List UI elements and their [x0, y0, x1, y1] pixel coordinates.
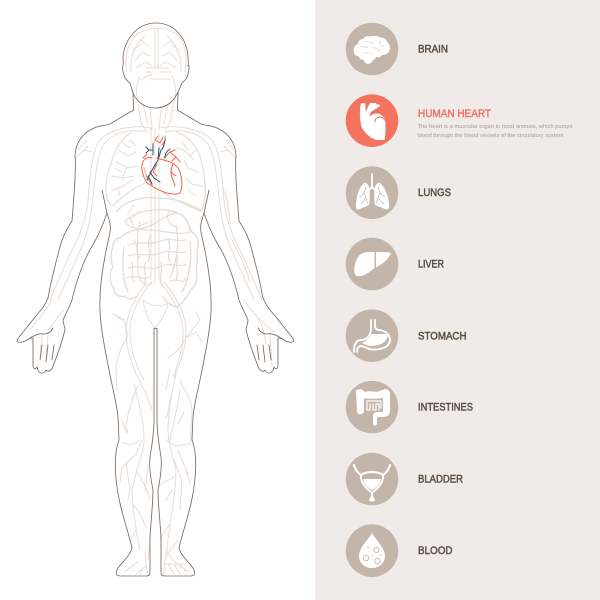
- large intestine: [110, 213, 198, 307]
- outline: right half: [157, 92, 294, 576]
- item: blood: [346, 524, 453, 577]
- description: blood through the blood vessels of the circulatory system: [418, 133, 564, 139]
- icon: heart: [360, 103, 386, 140]
- item: intestines: [346, 381, 473, 433]
- item: lungs: [346, 166, 451, 219]
- heart illustration: [142, 136, 182, 194]
- icon: intestines: [356, 389, 390, 426]
- item: liver: [346, 238, 444, 290]
- left leg vessels: [113, 314, 128, 390]
- icon: brain: [354, 36, 390, 64]
- pelvis and bladder: [126, 282, 151, 380]
- heart outline and arteries: [142, 136, 182, 194]
- icon: lungs: [356, 174, 389, 210]
- label: brain: BRAIN: [418, 43, 448, 55]
- icon: liver: [354, 252, 391, 276]
- left foot vessels: [124, 550, 148, 574]
- neck vessels: [137, 97, 175, 130]
- icon: blood drop: [359, 533, 385, 568]
- brain vessels: [126, 28, 186, 98]
- panel: organ list background: [315, 0, 600, 600]
- item: stomach: [346, 309, 467, 362]
- hand vessels: [30, 300, 274, 366]
- right foot vessels: [164, 550, 190, 574]
- icon: bladder: [354, 465, 390, 502]
- right lung: [160, 132, 205, 211]
- outline: left half: [17, 92, 154, 576]
- shoulders and arm vessels left: [50, 127, 152, 300]
- outline: head and face: [123, 23, 189, 108]
- body outline: [17, 23, 294, 576]
- item: human heart: [346, 94, 574, 147]
- right leg vessels: [166, 312, 202, 445]
- item: brain: [346, 23, 448, 75]
- description: The heart is a muscular organ in most animals, which pumps: [418, 124, 573, 130]
- label: bladder: BLADDER: [418, 474, 463, 486]
- diaphragm: [116, 198, 202, 212]
- label: liver: LIVER: [418, 258, 444, 270]
- left lung: [106, 133, 145, 205]
- label: blood: BLOOD: [418, 545, 453, 557]
- heading: human heart: HUMAN HEART: [418, 108, 491, 120]
- small intestine: [126, 222, 186, 286]
- crotch: [154, 328, 157, 330]
- aorta and vena cava: [151, 128, 159, 284]
- label: intestines: INTESTINES: [418, 402, 473, 414]
- human body figure: [17, 23, 294, 576]
- shoulders and arm vessels right: [159, 127, 262, 300]
- label: lungs: LUNGS: [418, 187, 451, 199]
- circulatory and organ lines: [30, 28, 274, 574]
- liver and stomach: [125, 210, 190, 233]
- item: bladder: [346, 453, 463, 505]
- icon: stomach: [354, 320, 390, 352]
- heart veins: [146, 140, 170, 184]
- label: stomach: STOMACH: [418, 330, 467, 342]
